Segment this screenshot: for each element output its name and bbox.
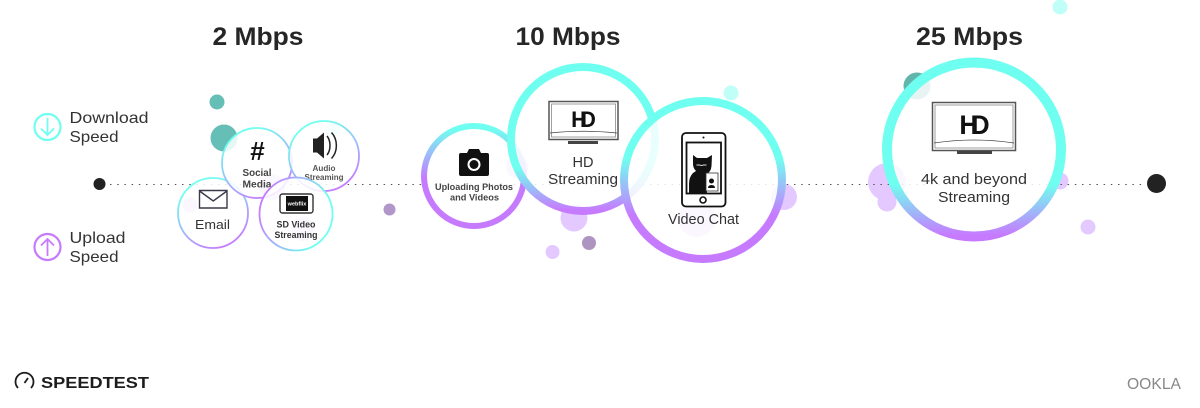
bubble: 4k and beyond streaming [887, 62, 1061, 236]
bubble: HD streaming: Streaming [548, 172, 618, 188]
logo: Ookla: OOKLA [1127, 376, 1182, 393]
icon: tablet with webflix: webflix [287, 202, 307, 208]
icon: HD television [549, 102, 618, 144]
icon: phone with cat [682, 133, 726, 206]
bubble: audio streaming [289, 121, 359, 191]
icon: camera [459, 149, 489, 176]
bubble: SD video streaming: SD Video [276, 220, 316, 230]
bubble: video chat [624, 101, 782, 259]
bubble: audio streaming: Streaming [304, 172, 344, 182]
bubble: social media [222, 128, 292, 198]
bubble: social media: Social [242, 167, 272, 179]
legend: download speed: Download [70, 110, 148, 127]
bubble: uploading photos and videos: Uploading Photos [435, 182, 513, 193]
bubble: video chat: Video Chat [668, 212, 739, 228]
logo: Speedtest: SPEEDTEST [41, 375, 149, 392]
logo: Speedtest [16, 373, 149, 392]
legend: download speed [34, 110, 148, 146]
decorative bubbles [182, 0, 1096, 259]
bubble: HD streaming: HD [572, 155, 594, 171]
heading: 25 Mbps: 25 Mbps [916, 23, 1023, 51]
heading: 2 Mbps: 2 Mbps [212, 23, 304, 51]
icon: speaker [313, 132, 336, 158]
bubble: HD streaming [511, 67, 655, 211]
bubble: email [178, 178, 248, 248]
legend: upload speed: Speed [70, 249, 118, 266]
bubble: 4k and beyond streaming: 4k and beyond [921, 172, 1027, 188]
bubble: SD video streaming [260, 178, 332, 250]
icon: HD television: HD [959, 110, 990, 140]
icon: HD television: HD [571, 107, 596, 132]
speed timeline [94, 174, 1166, 193]
bubble: email: Email [195, 217, 230, 232]
heading: 10 Mbps: 10 Mbps [516, 23, 620, 51]
bubble: social media: Media [242, 178, 272, 190]
icon: HD television [932, 102, 1016, 154]
bubble: SD video streaming: Streaming [274, 230, 318, 241]
icon: envelope [200, 190, 227, 208]
bubble: uploading photos and videos: and Videos [450, 192, 499, 204]
legend: upload speed: Upload [70, 230, 126, 247]
legend: download speed: Speed [70, 129, 118, 146]
legend: upload speed [34, 230, 126, 266]
bubble: uploading photos and videos [424, 126, 524, 226]
bubble: 4k and beyond streaming: Streaming [938, 190, 1010, 206]
icon: hashtag: # [250, 136, 265, 166]
bubble: audio streaming: Audio [312, 163, 336, 173]
